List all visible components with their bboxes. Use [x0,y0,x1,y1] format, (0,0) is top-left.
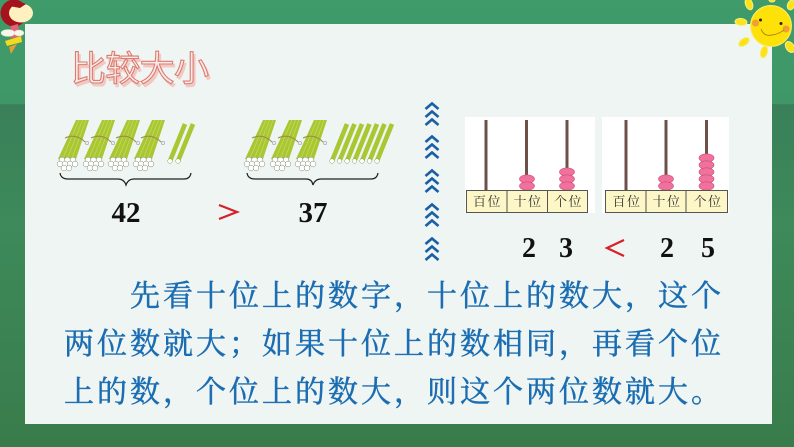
explanation text: 两位数就大；如果十位上的数相同，再看个位 [64,319,724,363]
title: 比较大小 [73,44,211,95]
numbers: 2 5: 2 [660,233,674,264]
explanation text [64,271,724,411]
abacus: 23: 个位 [554,191,583,210]
abacus: 25: 百位 [612,191,642,210]
icon: sun [735,0,794,59]
greater-than sign [219,205,237,219]
brace: 42 [60,173,191,185]
title: 比较大小 [71,41,209,92]
abacus: 25 [602,117,729,213]
numbers: 2 3 [522,233,573,264]
numbers: 2 3: 2 [522,233,536,264]
numbers: 2 5 [660,233,715,264]
numbers: 2 5: 5 [701,233,715,264]
chevron divider [426,104,438,260]
number 42: 42 [112,197,140,229]
sticks: 42 [57,120,193,171]
explanation text: 先看十位上的数字，十位上的数大，这个 [130,271,724,315]
explanation text: 上的数，个位上的数大，则这个两位数就大。 [64,367,724,411]
icon: girl [0,0,33,54]
less-than sign [607,240,624,256]
numbers: 2 3: 3 [559,233,573,264]
brace: 37 [247,173,378,185]
sticks: 37 [244,120,392,171]
abacus: 23 [465,117,595,213]
abacus: 25: 个位 [693,191,723,210]
abacus: 25: 十位 [652,191,682,210]
abacus: 23: 十位 [513,191,543,210]
number 37: 37 [298,197,328,229]
abacus: 23: 百位 [473,191,502,210]
